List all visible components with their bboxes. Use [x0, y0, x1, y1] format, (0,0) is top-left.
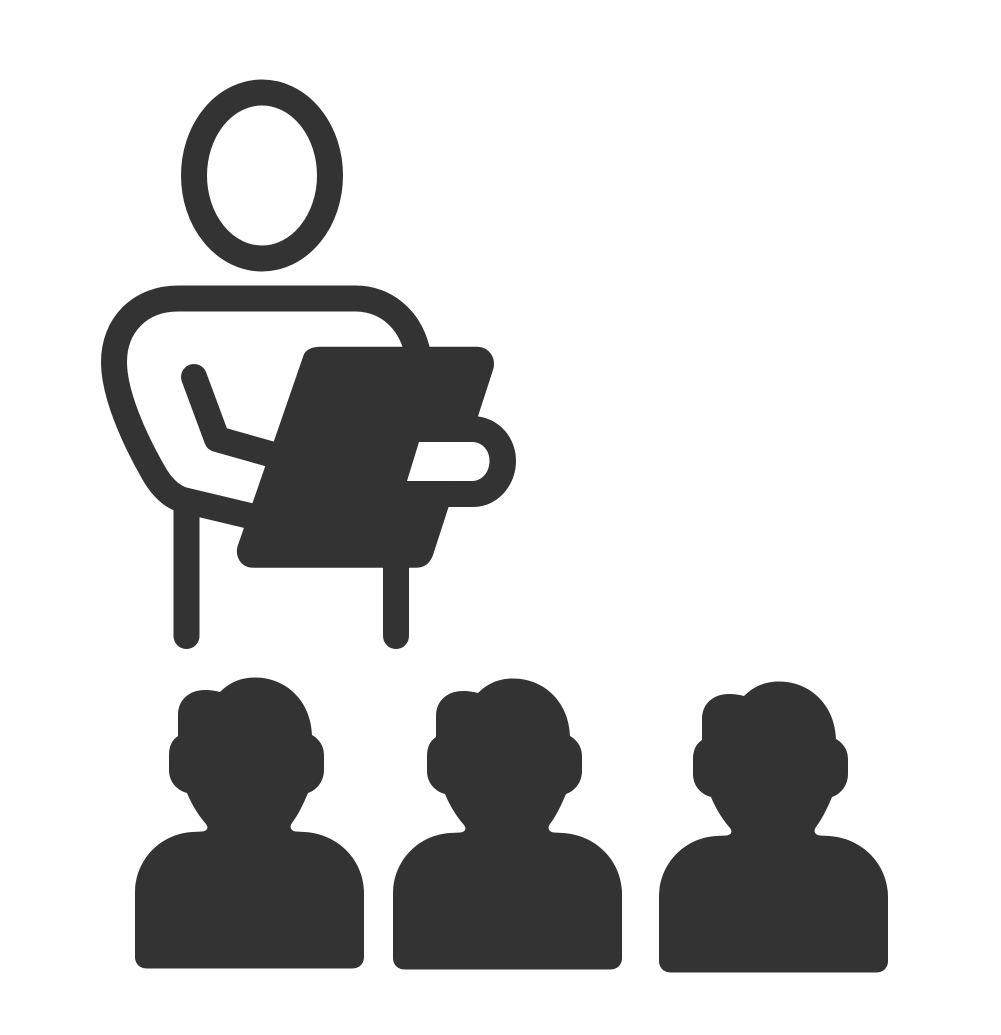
hand inner gap: [407, 442, 490, 481]
presenter figure: [114, 92, 516, 636]
audience member center: [393, 678, 622, 970]
chair leg right: [383, 560, 409, 636]
presenter head: [194, 92, 330, 258]
clipboard: [237, 347, 494, 568]
hand ring behind clipboard: [440, 416, 516, 507]
audience member left: [135, 678, 364, 968]
presenter body and arm: [114, 298, 417, 516]
presenter forearm: [194, 377, 270, 454]
audience member right: [659, 682, 888, 972]
chair leg left: [174, 510, 200, 636]
